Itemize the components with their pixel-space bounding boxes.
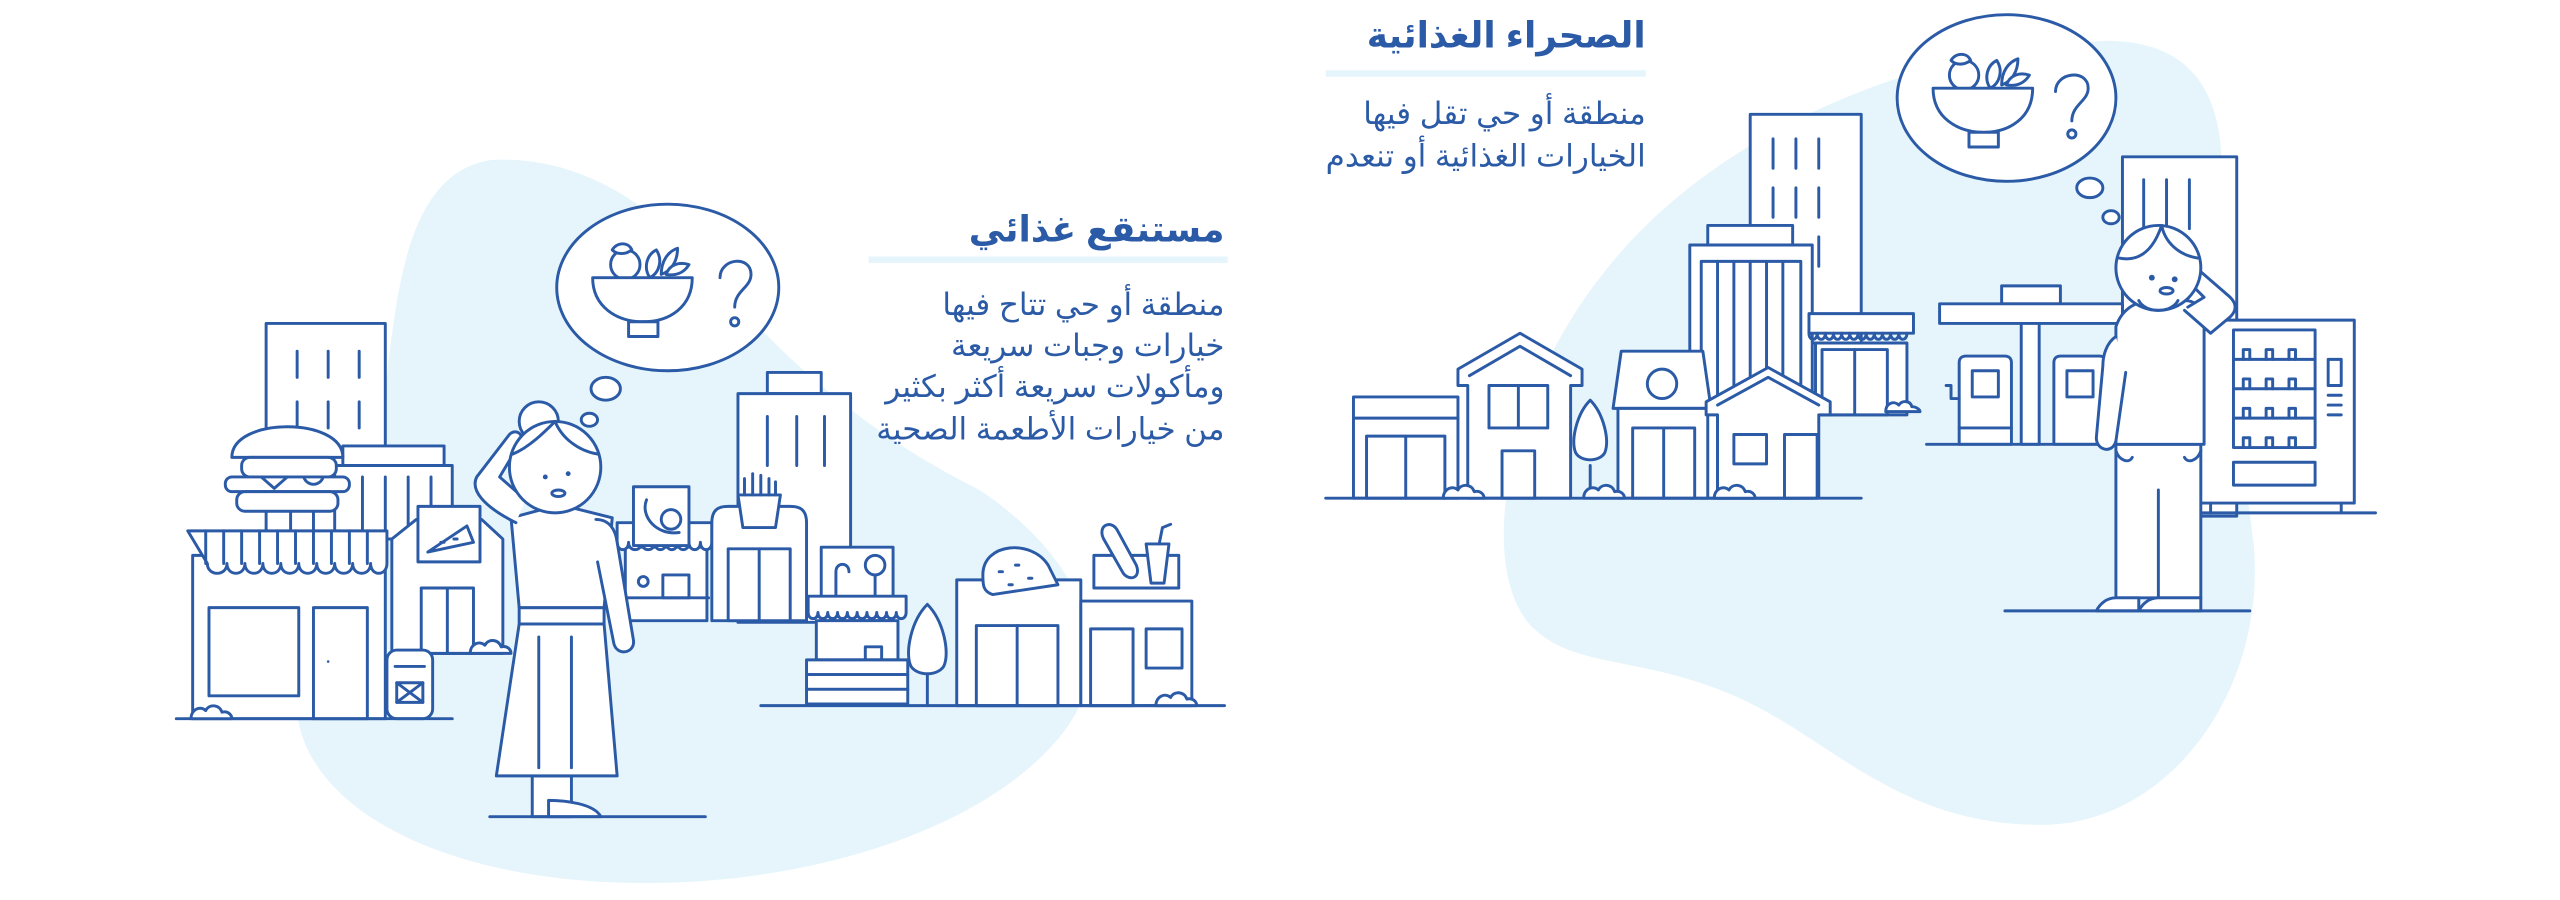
building: tall left bbox=[266, 323, 385, 536]
ground line woman bbox=[490, 816, 705, 818]
person: woman bbox=[475, 402, 634, 817]
ground line gas bbox=[1927, 443, 2122, 445]
icon: tree right bbox=[1574, 400, 1607, 498]
building: awning shop bbox=[188, 531, 387, 719]
building: tall right-center bbox=[738, 372, 851, 622]
building: tall behind man bbox=[2122, 157, 2237, 516]
background blob left bbox=[296, 160, 1091, 883]
text block: right description: منطقة أو حي تقل فيها bbox=[1363, 93, 1646, 132]
person: man bbox=[2096, 225, 2235, 611]
building: fruit shop bbox=[617, 487, 712, 621]
building: gable house bbox=[1458, 333, 1582, 498]
icon: vending machine bbox=[2196, 320, 2354, 513]
scene: left food swamp bbox=[176, 204, 1224, 817]
building: small house bbox=[1706, 368, 1830, 498]
heading: right: الصحراء الغذائية bbox=[1367, 14, 1646, 56]
building: behind burger bbox=[335, 446, 452, 539]
text block: left description: ومأكولات سريعة أكثر بكثير bbox=[883, 365, 1224, 405]
ground line man bbox=[2005, 610, 2250, 612]
building: round sign shop bbox=[1613, 351, 1711, 498]
ground line left bbox=[176, 718, 452, 720]
building: pizza shop bbox=[392, 506, 503, 653]
heading: left bbox=[869, 209, 1228, 263]
building: tall right bbox=[1750, 114, 1861, 343]
heading: left: مستنقع غذائي bbox=[969, 209, 1224, 251]
building: candy stand bbox=[807, 547, 908, 704]
building: hotdog shop bbox=[1081, 524, 1192, 706]
icon: tree bbox=[909, 604, 946, 706]
building: flat shop bbox=[1353, 397, 1458, 498]
text block: left description: من خيارات الأطعمة الصحية bbox=[876, 409, 1224, 447]
text block: right description bbox=[1326, 93, 1646, 175]
text block: left description bbox=[876, 284, 1224, 447]
ground line right bbox=[1326, 497, 1861, 499]
text block: left description: خيارات وجبات سريعة bbox=[951, 328, 1224, 364]
scene: right food desert bbox=[1326, 15, 2376, 611]
heading: right bbox=[1326, 14, 1646, 77]
building: awning shop right bbox=[1809, 314, 1920, 415]
text block: left description: منطقة أو حي تتاح فيها bbox=[942, 284, 1224, 323]
icon: thought bubble left bbox=[557, 204, 779, 426]
icon: burger sign bbox=[225, 427, 349, 531]
ground line center bbox=[761, 705, 1224, 707]
text block: right description: الخيارات الغذائية أو تنعدم bbox=[1326, 136, 1646, 175]
icon: mailbox bbox=[387, 650, 433, 719]
building: fries shop bbox=[712, 474, 807, 621]
building: office bbox=[1690, 225, 1812, 498]
background blob right bbox=[1504, 41, 2255, 825]
icon: gas station bbox=[1940, 286, 2122, 444]
building: taco shop bbox=[957, 548, 1081, 706]
icon: thought bubble right bbox=[1897, 15, 2119, 224]
